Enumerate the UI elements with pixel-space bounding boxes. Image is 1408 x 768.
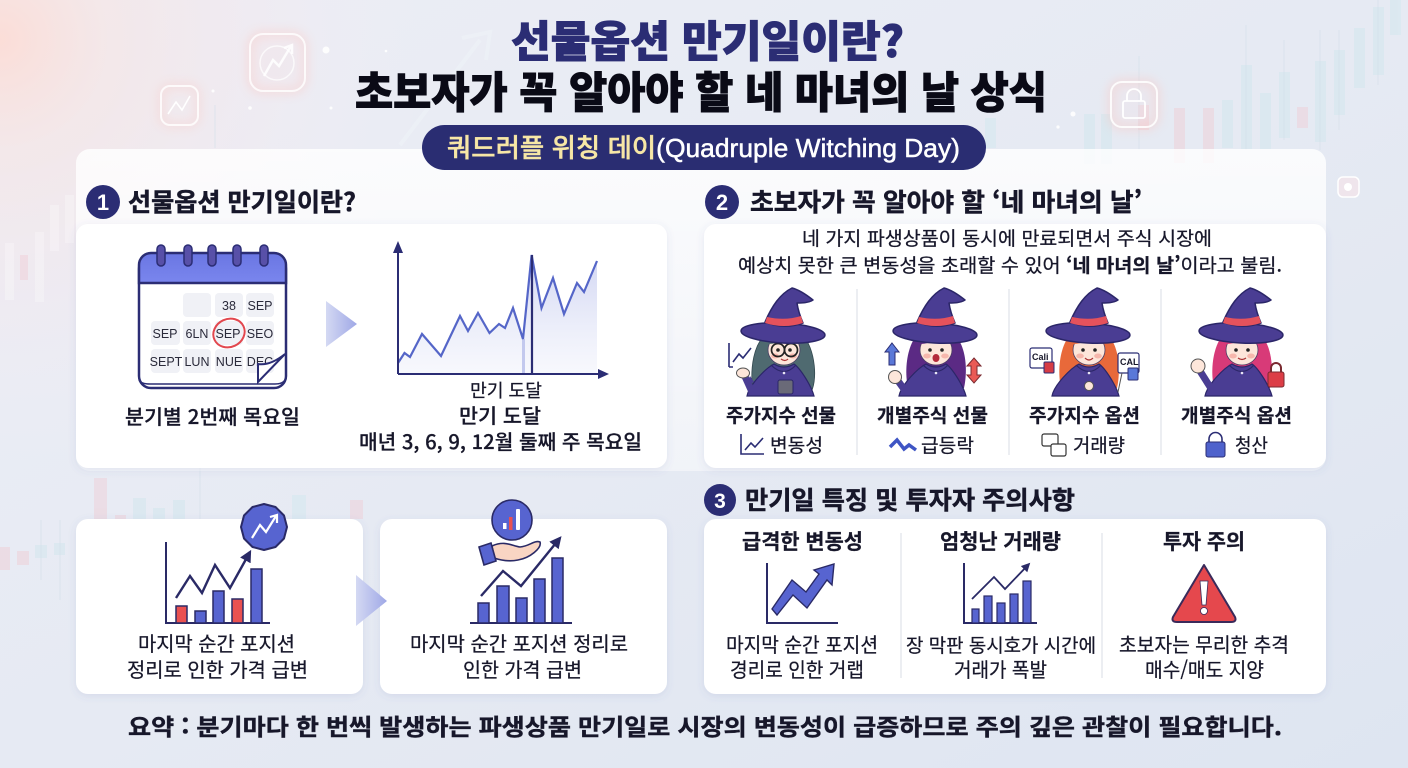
faint arrow [400, 32, 490, 145]
icon: calendar: DEC [247, 355, 273, 369]
panel: left lower card [76, 504, 363, 694]
text [410, 628, 628, 683]
text: 마지막 순간 포지션 [726, 629, 878, 658]
label: 청산: 청산 [1235, 431, 1268, 458]
icon: calendar [139, 245, 286, 388]
text: 마지막 순간 포지션 [138, 628, 295, 657]
section 3 heading: 3 [714, 490, 726, 513]
label: 거래량: 거래량 [1073, 431, 1125, 458]
icon: hand holding ball [479, 500, 540, 565]
label: 급등락: 급등락 [921, 431, 974, 458]
section 3 heading: 만기일 특징 및 투자자 주의사항 [745, 481, 1075, 517]
text: calendar caption: 분기별 2번째 목요일 [125, 401, 300, 430]
witch labels: 개별주식 선물 [877, 401, 988, 428]
chart: volume [964, 563, 1037, 623]
icon: witch 3: Cali [1032, 352, 1049, 362]
text: chart caption: 매년 3, 6, 9, 12월 둘째 주 목요일 [359, 426, 642, 455]
label: 변동성: 변동성 [770, 431, 823, 458]
column titles: 급격한 변동성 [742, 526, 863, 556]
text: 매수/매도 지양 [1145, 654, 1264, 683]
icon: calendar: LUN [184, 355, 210, 369]
glowing icon: tiny badge [1338, 177, 1359, 197]
text: description: 예상치 못한 큰 변동성을 초래할 수 있어 ‘네 마녀의 날’이라고 불림. [738, 251, 1282, 278]
section 2 heading: 초보자가 꼭 알아야 할 ‘네 마녀의 날’ [750, 183, 1142, 219]
text: chart caption [359, 377, 642, 455]
title: 선물옵션 만기일이란? [511, 8, 904, 70]
witch labels: 개별주식 옵션 [1181, 401, 1292, 428]
text: 인한 가격 급변 [463, 654, 582, 683]
witch labels: 주가지수 선물 [726, 401, 836, 428]
icon: calendar: SEO [247, 327, 273, 341]
label: 거래량 [1042, 431, 1125, 458]
panel: section 3 card [704, 519, 1326, 694]
title [355, 8, 1047, 121]
text: 초보자는 무리한 추격 [1119, 629, 1289, 658]
icon: badge [241, 504, 287, 550]
text: description: 네 가지 파생상품이 동시에 만료되면서 주식 시장에 [802, 224, 1212, 251]
icon: witch 4 [1191, 288, 1284, 396]
section 1 heading: 선물옵션 만기일이란? [128, 183, 356, 219]
text: 거래가 폭발 [954, 654, 1047, 683]
arrow [326, 301, 357, 347]
icon: calendar: SEP [215, 327, 241, 341]
section 2 heading: 2 [716, 190, 728, 215]
icon: calendar: NUE [216, 355, 242, 369]
label: 급등락 [890, 431, 974, 458]
summary: 요약 : 분기마다 한 번씩 발생하는 파생상품 만기일로 시장의 변동성이 급증하므로 주의 깊은 관찰이 필요합니다. [128, 708, 1282, 742]
subtitle pill: 쿼드러플 위칭 데이(Quadruple Witching Day) [447, 128, 960, 165]
icon: witch 1 [729, 288, 825, 396]
icon: witch 3 [1030, 288, 1139, 396]
icon: calendar: SEP [152, 327, 178, 341]
text: 경리로 인한 거랩 [730, 654, 864, 683]
icon: calendar: SEPT [150, 355, 183, 369]
title: 초보자가 꼭 알아야 할 네 마녀의 날 상식 [355, 59, 1047, 121]
arrow between lower cards [356, 575, 387, 626]
chart: rising bars [470, 538, 572, 623]
text: 마지막 순간 포지션 정리로 [410, 628, 628, 657]
glowing icon: small chart [161, 86, 198, 125]
icon: calendar: 38 [222, 299, 236, 313]
panel: middle lower card [380, 500, 667, 694]
sparkle dots [212, 46, 1076, 129]
column titles: 투자 주의 [1163, 526, 1245, 556]
witch labels: 주가지수 옵션 [1029, 401, 1140, 428]
icon: witch 2 [885, 288, 981, 396]
panel: section 2 card [704, 224, 1326, 468]
main panel [76, 149, 1326, 471]
icon: calendar: 6LN [186, 327, 208, 341]
text: description [738, 224, 1282, 278]
text: chart caption: 만기 도달 [459, 400, 541, 429]
label: 변동성 [741, 431, 823, 458]
chart: expiry spike [393, 241, 609, 379]
icon: volatility arrow [767, 563, 838, 623]
text: 장 막판 동시호가 시간에 [906, 631, 1096, 658]
text: 정리로 인한 가격 급변 [127, 654, 308, 683]
glowing icon: growth badge [250, 34, 305, 91]
text [127, 628, 308, 683]
section 1 heading: 1 [97, 190, 109, 215]
icon: calendar: SEP [247, 299, 273, 313]
text: chart caption: 만기 도달 [470, 377, 542, 403]
glowing icon: lock [1111, 82, 1157, 127]
label: 청산 [1206, 431, 1268, 458]
witch labels [726, 401, 1292, 428]
text [726, 629, 1289, 683]
panel: section 1 card [76, 224, 667, 468]
column titles [742, 526, 1245, 556]
icon: witch 3: CAL [1120, 357, 1139, 367]
chart: bars with line [166, 542, 270, 623]
column titles: 엄청난 거래량 [940, 526, 1061, 556]
icon: warning [1172, 565, 1236, 622]
background candlesticks [0, 0, 1401, 600]
